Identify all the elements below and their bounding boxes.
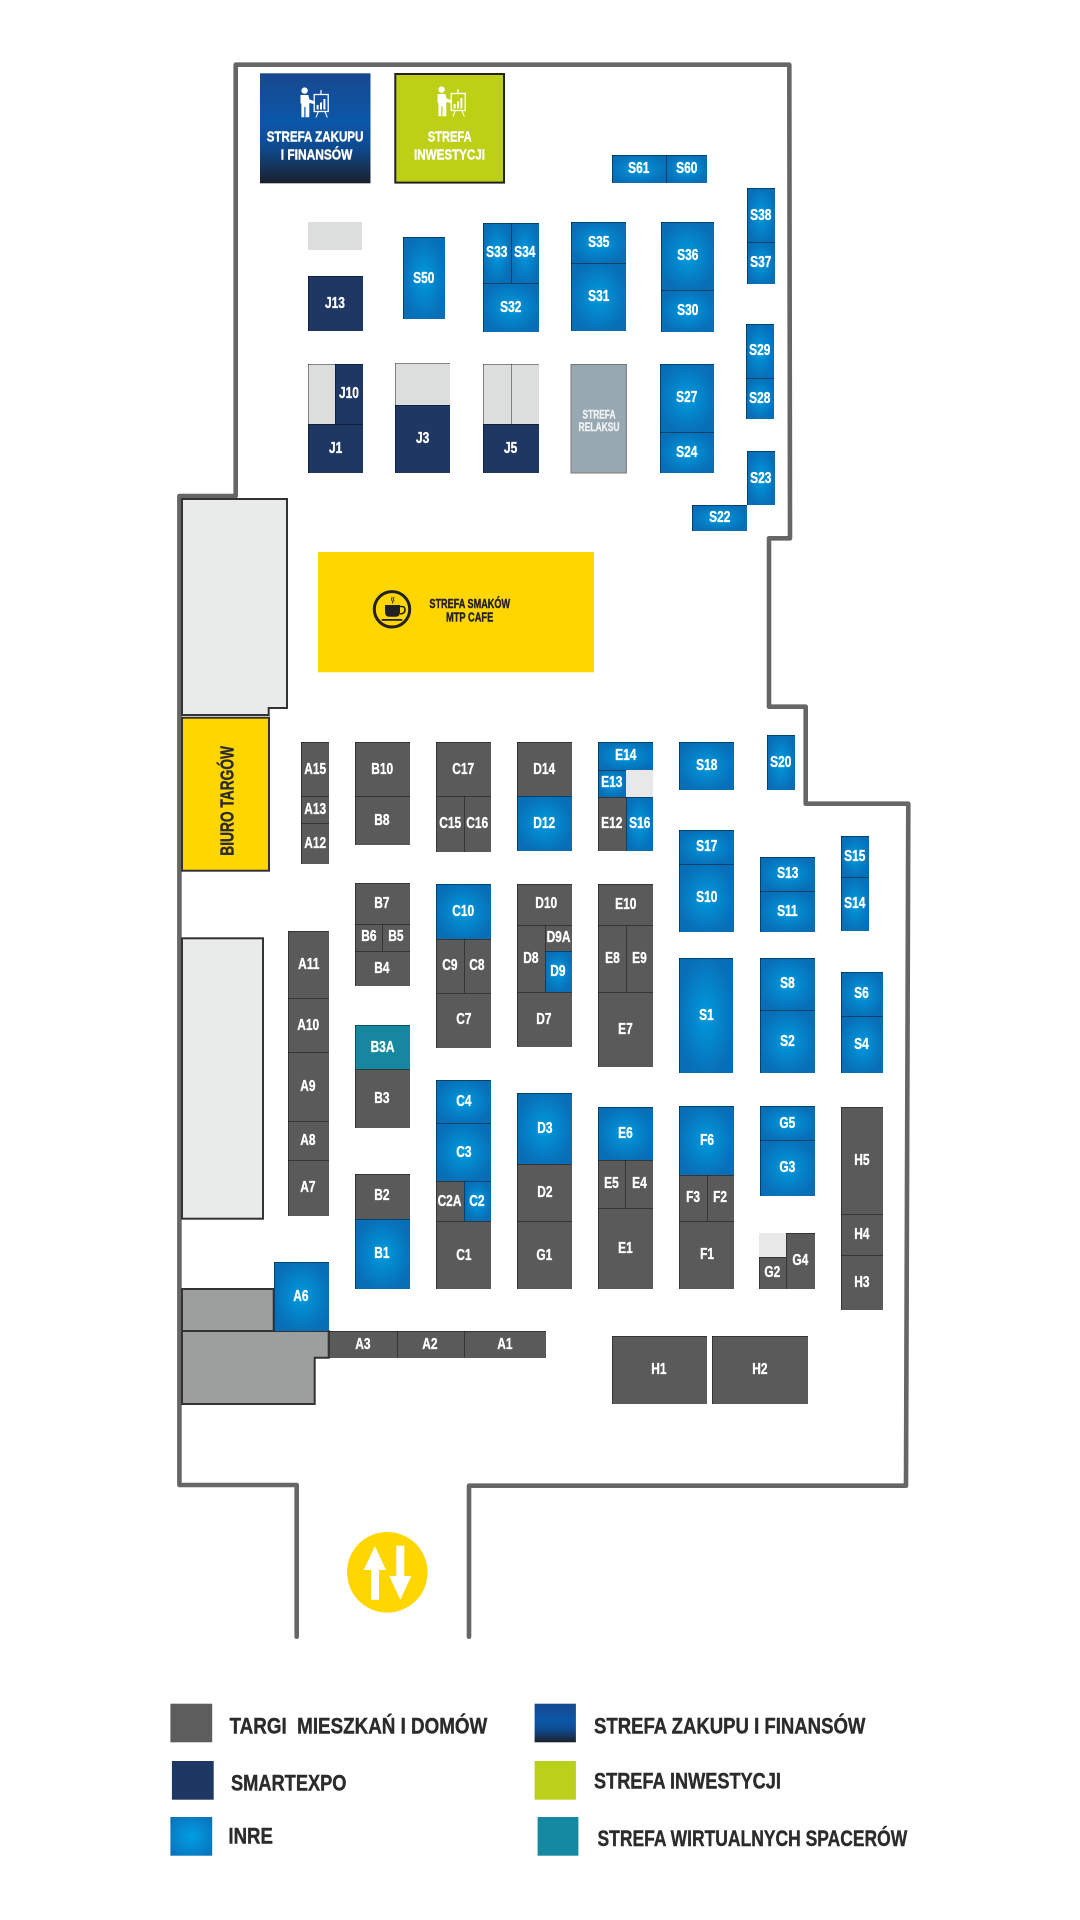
panel: strefa zakupu i finansów: STREFA ZAKUPU xyxy=(267,130,363,146)
panel: strefa smaków mtp cafe: STREFA SMAKÓW xyxy=(429,596,510,611)
booth A6: A6 xyxy=(294,1288,309,1305)
booth S1: S1 xyxy=(699,1007,713,1024)
booth A2: A2 xyxy=(423,1336,438,1353)
legend: strefa wirtualnych spacerów: STREFA WIRTUALNYCH SPACERÓW xyxy=(598,1826,907,1851)
booth D14: D14 xyxy=(534,761,556,778)
booth E5: E5 xyxy=(604,1175,619,1192)
booth D2: D2 xyxy=(537,1184,552,1201)
legend: strefa inwestycji xyxy=(535,1761,781,1800)
booth S60 xyxy=(666,155,707,183)
empty stand above G2 xyxy=(759,1233,786,1257)
booth C9: C9 xyxy=(442,957,458,974)
booth C15: C15 xyxy=(439,815,461,832)
booth S1 xyxy=(679,958,733,1073)
booth A9: A9 xyxy=(301,1078,316,1095)
booth J13: J13 xyxy=(325,295,345,312)
booth A8 xyxy=(288,1121,329,1160)
booth A13: A13 xyxy=(304,801,326,818)
booth S18 xyxy=(679,742,734,790)
booth C17: C17 xyxy=(453,761,475,778)
booth C16: C16 xyxy=(466,815,488,832)
empty stand beside J10 xyxy=(308,364,335,424)
booth S10: S10 xyxy=(696,889,717,906)
booth A10: A10 xyxy=(297,1017,319,1034)
booth S15: S15 xyxy=(844,848,865,865)
booth S11: S11 xyxy=(777,903,798,920)
booth S50: S50 xyxy=(413,270,434,287)
booth D8: D8 xyxy=(523,950,538,967)
legend: strefa zakupu i finansów xyxy=(535,1704,866,1742)
booth D12: D12 xyxy=(534,815,556,832)
booth F2 xyxy=(707,1175,734,1221)
booth S14 xyxy=(841,877,869,931)
booth C9 xyxy=(436,939,464,993)
booth S16: S16 xyxy=(629,815,650,832)
booth S2: S2 xyxy=(780,1033,795,1050)
booth B7: B7 xyxy=(375,895,390,912)
empty stand above J5 left xyxy=(483,364,511,424)
booth B10 xyxy=(355,742,410,796)
booth E4 xyxy=(625,1160,653,1208)
booth A8: A8 xyxy=(301,1132,316,1149)
legend: targi mieszkań i domów xyxy=(170,1704,487,1742)
booth S23 xyxy=(747,451,775,505)
booth S28: S28 xyxy=(750,390,771,407)
booth C2A xyxy=(436,1181,464,1221)
booth E1 xyxy=(598,1208,653,1289)
booth S50 xyxy=(403,237,445,319)
booth E13 xyxy=(598,770,626,797)
booth B4: B4 xyxy=(375,960,390,977)
hall outline walls xyxy=(179,65,908,1637)
booth A11: A11 xyxy=(298,956,319,973)
booth E9 xyxy=(626,925,653,992)
booth S2 xyxy=(760,1010,815,1073)
booth E6 xyxy=(598,1107,653,1160)
booth E7 xyxy=(598,992,653,1067)
booth J10: J10 xyxy=(339,385,359,402)
booth D9 xyxy=(545,951,572,992)
booth D3: D3 xyxy=(537,1120,552,1137)
booth E6: E6 xyxy=(618,1125,632,1142)
booth C10: C10 xyxy=(453,903,475,920)
booth S29: S29 xyxy=(750,342,771,359)
booth E1: E1 xyxy=(618,1240,632,1257)
biuro targów office: BIURO TARGÓW xyxy=(216,746,237,856)
booth S11 xyxy=(760,891,815,932)
booth B3A xyxy=(355,1025,410,1069)
booth A3 xyxy=(329,1331,397,1358)
booth D8 xyxy=(517,925,545,992)
booth S22 xyxy=(692,505,747,531)
booth S33: S33 xyxy=(487,244,508,261)
booth A3: A3 xyxy=(355,1336,370,1353)
panel: strefa zakupu i finansów xyxy=(260,73,370,183)
booth S13: S13 xyxy=(777,865,798,882)
booth E5 xyxy=(598,1160,625,1208)
booth G3: G3 xyxy=(780,1159,796,1176)
booth J5 xyxy=(483,424,539,473)
booth S36: S36 xyxy=(677,247,698,264)
booth H5: H5 xyxy=(854,1152,869,1169)
booth S32 xyxy=(483,283,539,332)
panel: strefa inwestycji: STREFA xyxy=(428,130,472,146)
panel: strefa inwestycji: INWESTYCJI xyxy=(414,147,485,163)
booth B2: B2 xyxy=(375,1187,390,1204)
booth S6: S6 xyxy=(855,985,869,1002)
legend: strefa wirtualnych spacerów xyxy=(538,1817,907,1856)
booth S61 xyxy=(612,155,666,183)
booth J3: J3 xyxy=(416,430,430,447)
booth J5: J5 xyxy=(504,440,518,457)
booth G3 xyxy=(760,1140,815,1196)
booth F1 xyxy=(679,1221,734,1289)
booth D14 xyxy=(517,742,572,796)
booth B10: B10 xyxy=(371,761,393,778)
booth B7 xyxy=(355,883,410,924)
booth J1: J1 xyxy=(329,440,342,457)
booth B6 xyxy=(355,924,382,951)
booth B4 xyxy=(355,951,410,986)
booth S28 xyxy=(746,378,774,419)
booth C16 xyxy=(464,796,491,852)
panel: strefa smaków mtp cafe: MTP CAFE xyxy=(446,611,493,625)
booth S27: S27 xyxy=(676,389,698,406)
booth B3: B3 xyxy=(375,1090,390,1107)
booth H4 xyxy=(841,1214,883,1255)
icon: presenter at chart, green panel xyxy=(438,86,465,116)
legend: inre: INRE xyxy=(228,1824,273,1849)
booth E10: E10 xyxy=(615,896,636,913)
booth C8: C8 xyxy=(470,957,485,974)
booth C2 xyxy=(464,1181,491,1221)
booth C2A: C2A xyxy=(438,1193,462,1210)
booth E10 xyxy=(598,884,653,925)
booth G4: G4 xyxy=(792,1252,808,1269)
service block top left xyxy=(182,499,287,715)
booth S13 xyxy=(760,857,815,891)
panel: strefa inwestycji xyxy=(395,74,504,183)
booth S35: S35 xyxy=(588,234,609,251)
booth A7: A7 xyxy=(301,1179,316,1196)
icon: presenter at chart, blue panel xyxy=(300,87,328,118)
booth C4 xyxy=(436,1080,491,1123)
booth E14 xyxy=(598,742,653,770)
booth B8: B8 xyxy=(375,812,390,829)
booth E4: E4 xyxy=(632,1175,646,1192)
booth E12 xyxy=(598,797,626,851)
booth A13 xyxy=(301,796,329,823)
booth S34 xyxy=(511,223,539,283)
booth S31: S31 xyxy=(588,288,609,305)
booth A10 xyxy=(288,998,329,1052)
booth D2 xyxy=(517,1164,572,1221)
panel: strefa relaksu: RELAKSU xyxy=(578,420,620,434)
legend: strefa zakupu i finansów: STREFA ZAKUPU I FINANSÓW xyxy=(594,1713,866,1738)
booth D10 xyxy=(517,884,572,925)
booth E12: E12 xyxy=(601,815,623,832)
booth S36 xyxy=(660,222,714,290)
booth C8 xyxy=(464,939,491,993)
booth B6: B6 xyxy=(361,928,376,945)
booth A1: A1 xyxy=(497,1336,512,1353)
booth D10: D10 xyxy=(535,895,557,912)
booth E14: E14 xyxy=(615,747,636,764)
icon: entrance arrows xyxy=(347,1532,428,1613)
technical block lower xyxy=(182,1331,329,1404)
booth S61: S61 xyxy=(629,160,650,177)
booth D7 xyxy=(517,992,572,1047)
booth S18: S18 xyxy=(696,757,717,774)
legend: inre xyxy=(170,1817,273,1856)
booth S14: S14 xyxy=(844,895,865,912)
booth S60: S60 xyxy=(676,160,697,177)
booth D9A xyxy=(545,925,572,951)
booth B3 xyxy=(355,1069,410,1128)
booth E8 xyxy=(598,925,626,992)
booth G1: G1 xyxy=(537,1247,553,1264)
booth G2: G2 xyxy=(765,1264,781,1281)
booth S35 xyxy=(571,222,626,263)
biuro targów office xyxy=(182,718,269,871)
booth S6 xyxy=(841,972,883,1016)
booth B3A: B3A xyxy=(370,1039,394,1056)
booth C7 xyxy=(436,993,491,1048)
booth H2 xyxy=(712,1336,808,1404)
legend: strefa inwestycji: STREFA INWESTYCJI xyxy=(594,1768,781,1793)
booth S24 xyxy=(660,432,714,473)
booth S8 xyxy=(760,958,815,1010)
booth J13 xyxy=(308,276,363,331)
booth S30: S30 xyxy=(677,302,698,319)
booth E8: E8 xyxy=(605,950,619,967)
booth F3 xyxy=(679,1175,707,1221)
booth S33 xyxy=(483,223,511,283)
booth H1: H1 xyxy=(652,1361,667,1378)
booth S16 xyxy=(626,797,653,851)
booth S38 xyxy=(747,188,775,242)
booth D7: D7 xyxy=(537,1011,552,1028)
booth C3: C3 xyxy=(456,1144,471,1161)
booth E13: E13 xyxy=(601,774,623,791)
booth D9: D9 xyxy=(551,963,566,980)
booth A1 xyxy=(464,1331,546,1358)
booth C1: C1 xyxy=(456,1247,471,1264)
booth C4: C4 xyxy=(456,1093,471,1110)
booth D9A: D9A xyxy=(546,929,570,946)
booth G1 xyxy=(517,1221,572,1289)
panel: strefa smaków mtp cafe xyxy=(318,552,594,672)
booth A6 xyxy=(274,1262,329,1331)
booth F3: F3 xyxy=(686,1189,700,1206)
booth H3 xyxy=(841,1255,883,1310)
service block middle left xyxy=(182,938,263,1219)
legend: smartexpo xyxy=(172,1761,346,1800)
legend: smartexpo: SMARTEXPO xyxy=(231,1771,346,1796)
booth B1: B1 xyxy=(375,1245,390,1262)
booth C2: C2 xyxy=(470,1193,485,1210)
booth S17 xyxy=(679,830,734,864)
booth A11 xyxy=(288,931,329,998)
booth S20: S20 xyxy=(770,754,791,771)
booth H1 xyxy=(612,1336,707,1404)
booth B1 xyxy=(355,1219,410,1289)
booth S27 xyxy=(660,364,714,432)
booth S4 xyxy=(841,1016,883,1073)
technical block upper xyxy=(182,1289,274,1331)
booth A12: A12 xyxy=(304,835,326,852)
booth C15 xyxy=(436,796,464,852)
booth A9 xyxy=(288,1052,329,1121)
booth B5: B5 xyxy=(388,928,404,945)
booth H5 xyxy=(841,1107,883,1214)
booth A15 xyxy=(301,742,329,796)
booth S10 xyxy=(679,864,734,932)
booth G4 xyxy=(786,1233,815,1289)
booth C10 xyxy=(436,884,491,939)
booth S38: S38 xyxy=(750,207,771,224)
booth H4: H4 xyxy=(854,1226,869,1243)
booth S37: S37 xyxy=(750,254,771,271)
booth S17: S17 xyxy=(696,838,717,855)
booth D3 xyxy=(517,1093,572,1164)
booth S30 xyxy=(660,290,714,332)
booth F1: F1 xyxy=(700,1246,714,1263)
booth B5 xyxy=(382,924,410,951)
booth S29 xyxy=(746,324,774,378)
legend: targi mieszkań i domów: TARGI MIESZKAŃ I DOMÓW xyxy=(230,1713,487,1738)
booth C17 xyxy=(436,742,491,796)
booth G2 xyxy=(759,1257,786,1289)
booth S22: S22 xyxy=(709,509,730,526)
booth J3 xyxy=(395,405,450,473)
booth J10 xyxy=(335,364,363,424)
booth B2 xyxy=(355,1174,410,1219)
panel: strefa zakupu i finansów: I FINANSÓW xyxy=(281,145,353,163)
booth S4: S4 xyxy=(855,1036,869,1053)
booth F6: F6 xyxy=(700,1132,714,1149)
panel: strefa relaksu xyxy=(571,364,626,473)
booth S34: S34 xyxy=(514,244,535,261)
booth S20 xyxy=(767,735,795,790)
booth S23: S23 xyxy=(750,470,771,487)
booth H3: H3 xyxy=(854,1274,869,1291)
booth F2: F2 xyxy=(714,1189,727,1206)
empty stand above J3 xyxy=(395,363,450,405)
empty stand above J5 right xyxy=(511,364,539,424)
booth S31 xyxy=(571,263,626,331)
booth G5 xyxy=(760,1106,815,1140)
booth F6 xyxy=(679,1106,734,1175)
booth C1 xyxy=(436,1221,491,1289)
booth E7: E7 xyxy=(618,1021,633,1038)
booth S24: S24 xyxy=(676,444,698,461)
booth H2: H2 xyxy=(752,1361,768,1378)
empty stand above J13 xyxy=(308,222,362,250)
booth S37 xyxy=(747,242,775,284)
booth A15: A15 xyxy=(304,761,326,778)
booth B8 xyxy=(355,796,410,845)
booth S32: S32 xyxy=(500,299,522,316)
booth S15 xyxy=(841,836,869,877)
panel: strefa relaksu: STREFA xyxy=(582,407,616,421)
booth A12 xyxy=(301,823,329,864)
booth J1 xyxy=(308,424,363,473)
booth G5: G5 xyxy=(780,1115,796,1132)
booth C3 xyxy=(436,1123,491,1181)
booth A2 xyxy=(397,1331,464,1358)
booth E9: E9 xyxy=(632,950,647,967)
booth C7: C7 xyxy=(456,1011,471,1028)
booth D12 xyxy=(517,796,572,851)
icon: coffee cup xyxy=(374,592,410,627)
empty stand beside E13 xyxy=(626,770,653,797)
booth S8: S8 xyxy=(780,975,795,992)
booth A7 xyxy=(288,1160,329,1216)
